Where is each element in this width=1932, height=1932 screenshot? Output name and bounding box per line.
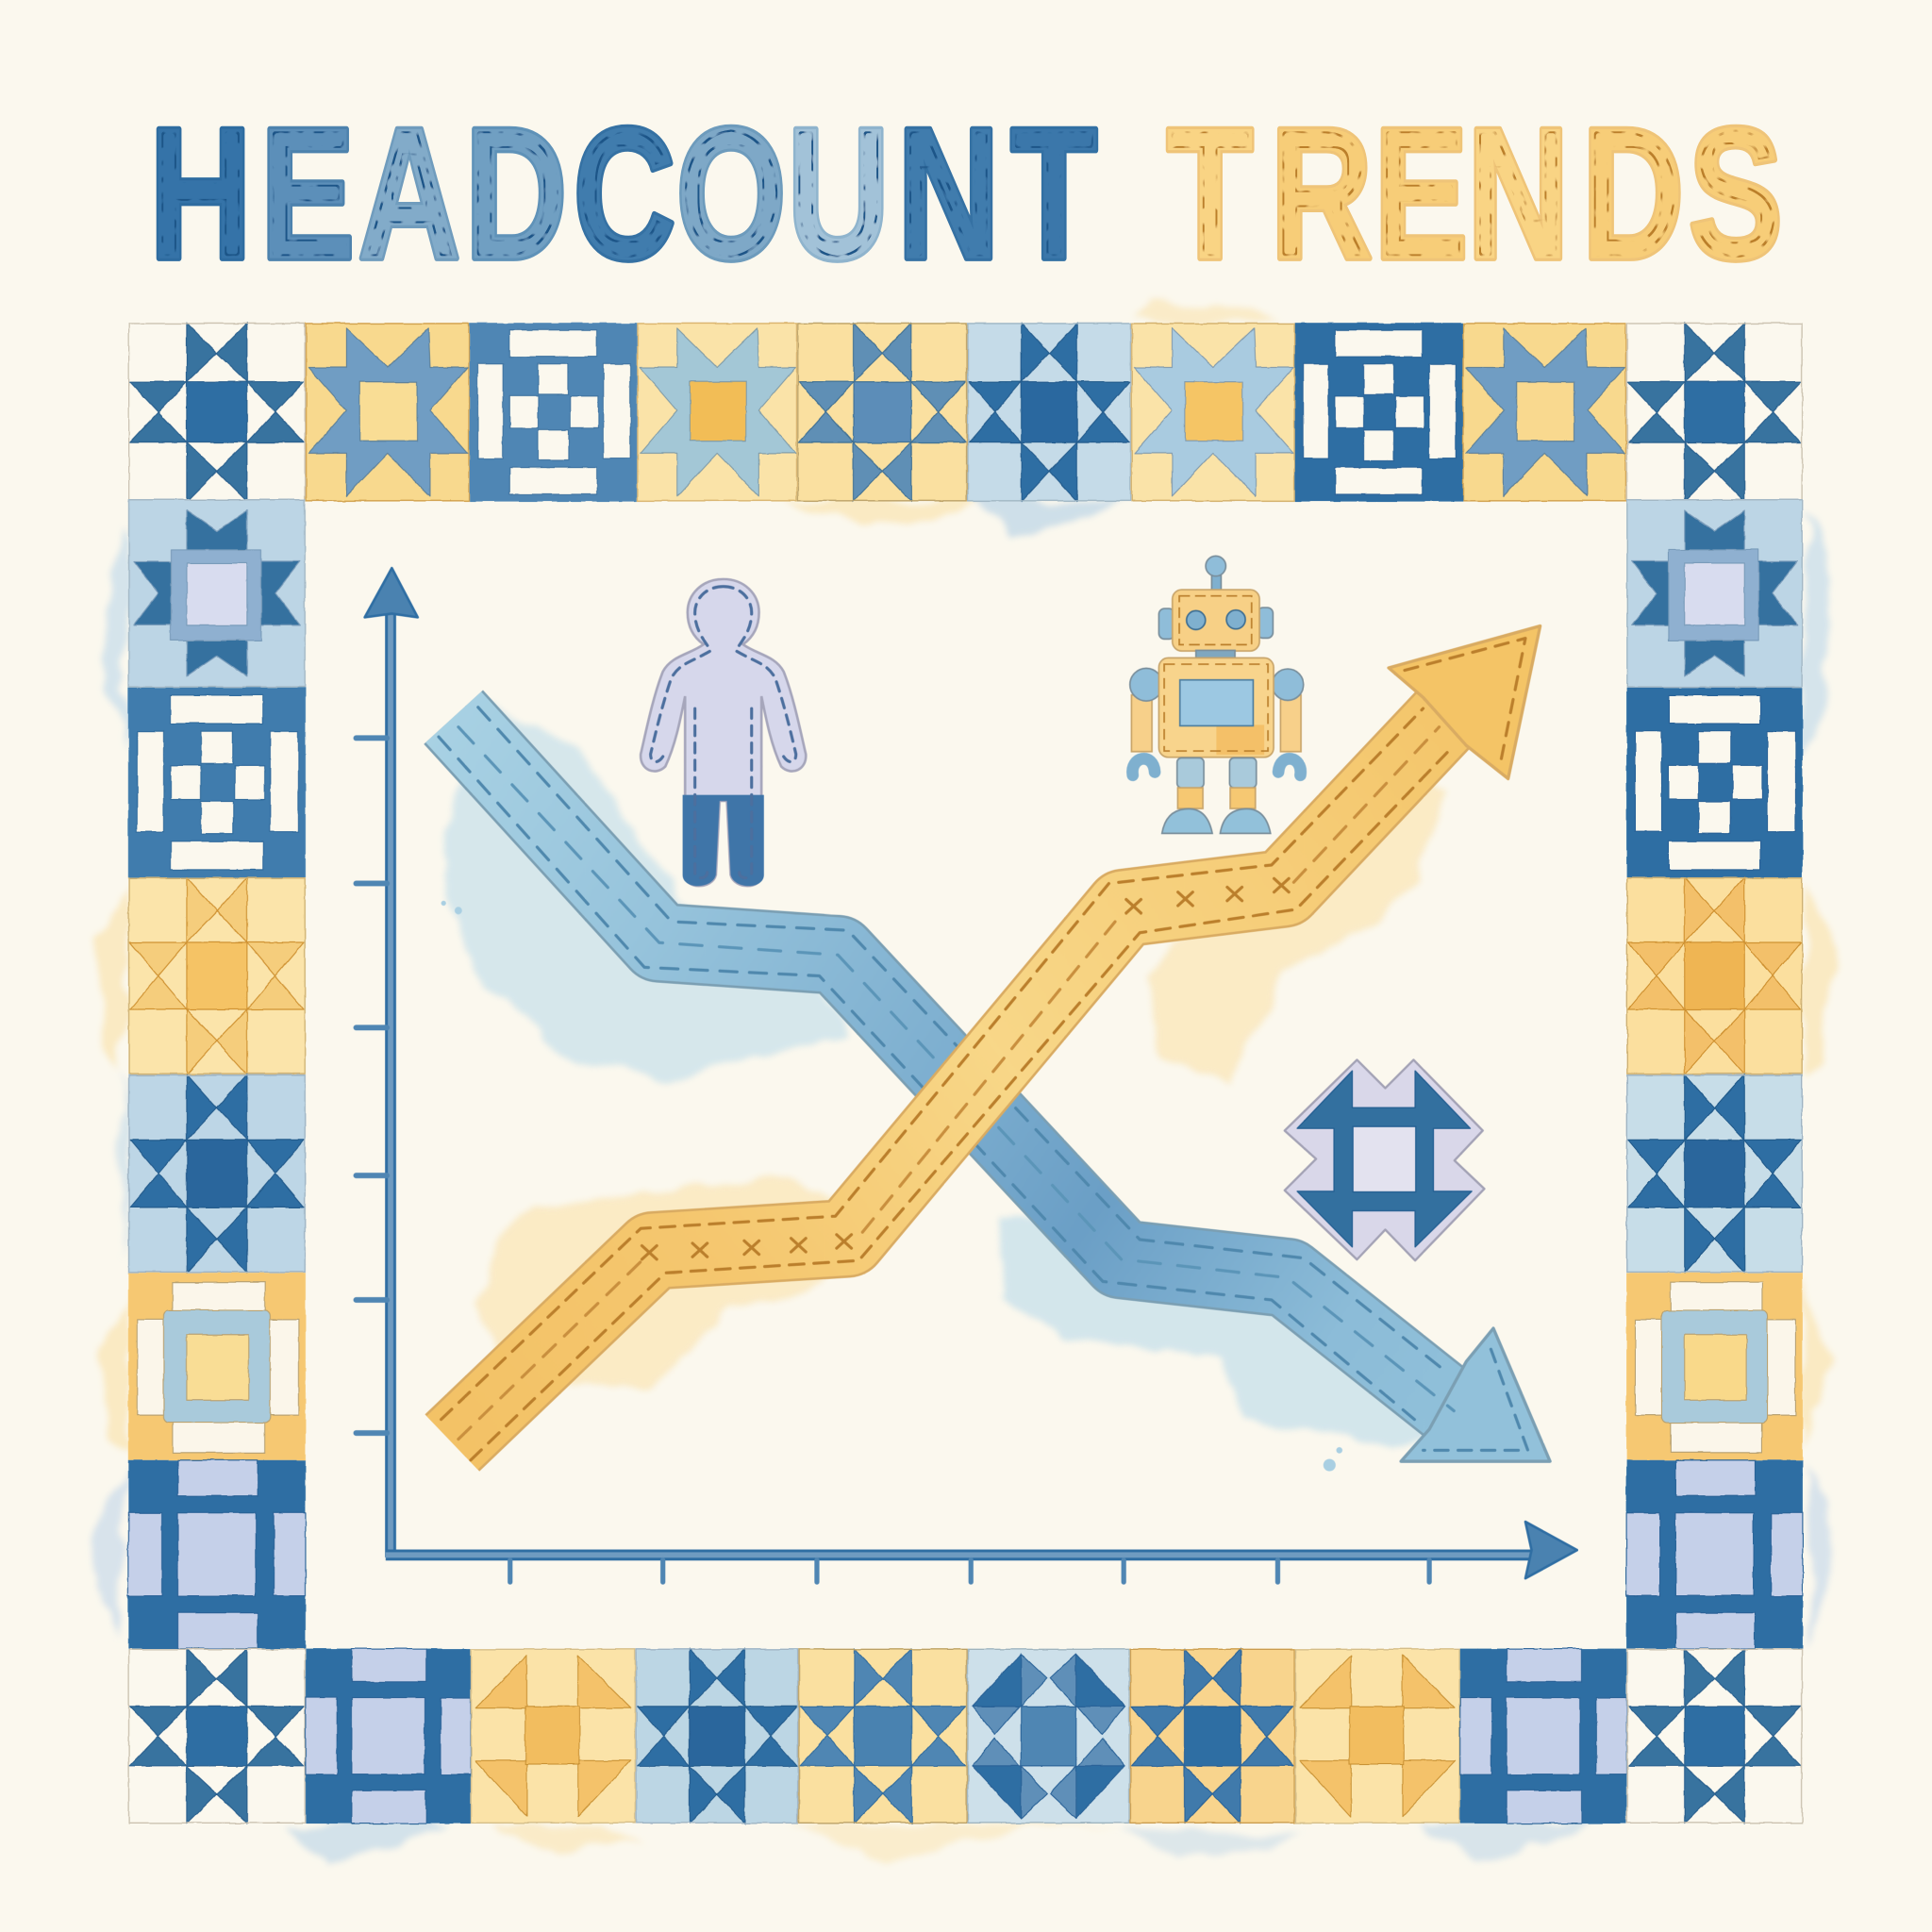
title — [149, 90, 1783, 298]
yellow ribbon stitching — [441, 708, 1424, 1420]
block: nine patch left — [128, 688, 306, 877]
title word: trends: R — [1270, 90, 1373, 298]
block: light blue star — [636, 1649, 798, 1824]
blue ribbon stitching — [478, 708, 1444, 1370]
blue watercolor wash behind falling line — [443, 705, 850, 1084]
left border blocks — [128, 499, 306, 1649]
title word: headcount: H — [149, 90, 252, 298]
title word: trends: N — [1467, 90, 1570, 298]
block: corner star bottom left — [128, 1649, 306, 1824]
block: diamond star — [967, 1649, 1130, 1824]
block: pale star orange centre — [637, 323, 797, 502]
title word: headcount: T — [1010, 90, 1097, 298]
rising yellow ribbon arrow — [441, 626, 1541, 1460]
block: framed star right — [1626, 499, 1803, 688]
block: yellow ohio star — [797, 323, 967, 502]
block: sash bottom right — [1460, 1649, 1626, 1824]
icon: robot — [1130, 556, 1304, 833]
block: corner star top right — [1626, 323, 1803, 502]
title word: trends: S — [1689, 90, 1783, 298]
paint droplets — [441, 901, 1342, 1472]
block: orange star right — [1626, 877, 1803, 1074]
cross stitches upper — [1126, 878, 1289, 913]
yellow watercolor wash lower — [475, 1176, 850, 1392]
title word: trends: D — [1582, 90, 1685, 298]
title word: headcount: E — [260, 90, 355, 298]
watercolor washes behind the quilt and chart — [93, 306, 1836, 1863]
right border blocks — [1626, 499, 1803, 1649]
block: churn dash — [471, 1649, 636, 1824]
block: pale star yellow centre — [1131, 323, 1295, 502]
block: blue star left — [128, 1074, 306, 1273]
block: yellow star right — [1462, 323, 1626, 502]
bottom border blocks — [128, 1649, 1803, 1824]
top border blocks — [128, 323, 1803, 502]
block: corner star bottom right — [1626, 1649, 1803, 1824]
title word: trends — [1167, 90, 1783, 298]
x axis — [386, 1522, 1577, 1582]
yellow watercolor wash upper — [1140, 776, 1448, 1084]
blue arrow head — [1401, 1328, 1550, 1461]
block: framed star left — [128, 499, 306, 688]
chart axes — [356, 568, 1577, 1582]
block: nine patch right — [1626, 688, 1803, 877]
title word: headcount: A — [358, 90, 460, 298]
block: yellow star bottom — [798, 1649, 967, 1824]
title word: headcount: C — [574, 90, 675, 298]
title word: headcount: D — [465, 90, 568, 298]
block: frame left — [128, 1273, 306, 1460]
icon: person — [641, 579, 806, 886]
y axis — [356, 568, 418, 1557]
falling blue ribbon arrow — [439, 708, 1550, 1461]
icon: shoo-fly quilt badge — [1285, 1059, 1484, 1260]
title word: trends: E — [1374, 90, 1469, 298]
block: orange star bottom — [1130, 1649, 1295, 1824]
block: churn dash right — [1295, 1649, 1460, 1824]
block: sash bottom — [306, 1649, 471, 1824]
yellow arrow head — [1389, 626, 1541, 778]
blue watercolor wash lower — [1001, 1214, 1436, 1444]
quilt border — [128, 323, 1803, 1824]
block: corner star top left — [128, 323, 306, 502]
block: sash right — [1626, 1460, 1803, 1649]
block: sash left — [128, 1460, 306, 1649]
block: dark nine patch — [1295, 323, 1462, 502]
block: blue star right — [1626, 1074, 1803, 1273]
title word: headcount: N — [897, 90, 1000, 298]
title word: headcount: O — [675, 90, 787, 298]
block: yellow star — [306, 323, 470, 502]
block: blue ohio star — [967, 323, 1131, 502]
title word: headcount: U — [787, 90, 890, 298]
block: nine patch — [470, 323, 637, 502]
cross stitches lower — [641, 1235, 852, 1259]
block: frame right — [1626, 1273, 1803, 1460]
title word: headcount — [149, 90, 1097, 298]
title word: trends: T — [1167, 90, 1254, 298]
block: orange star left — [128, 877, 306, 1074]
